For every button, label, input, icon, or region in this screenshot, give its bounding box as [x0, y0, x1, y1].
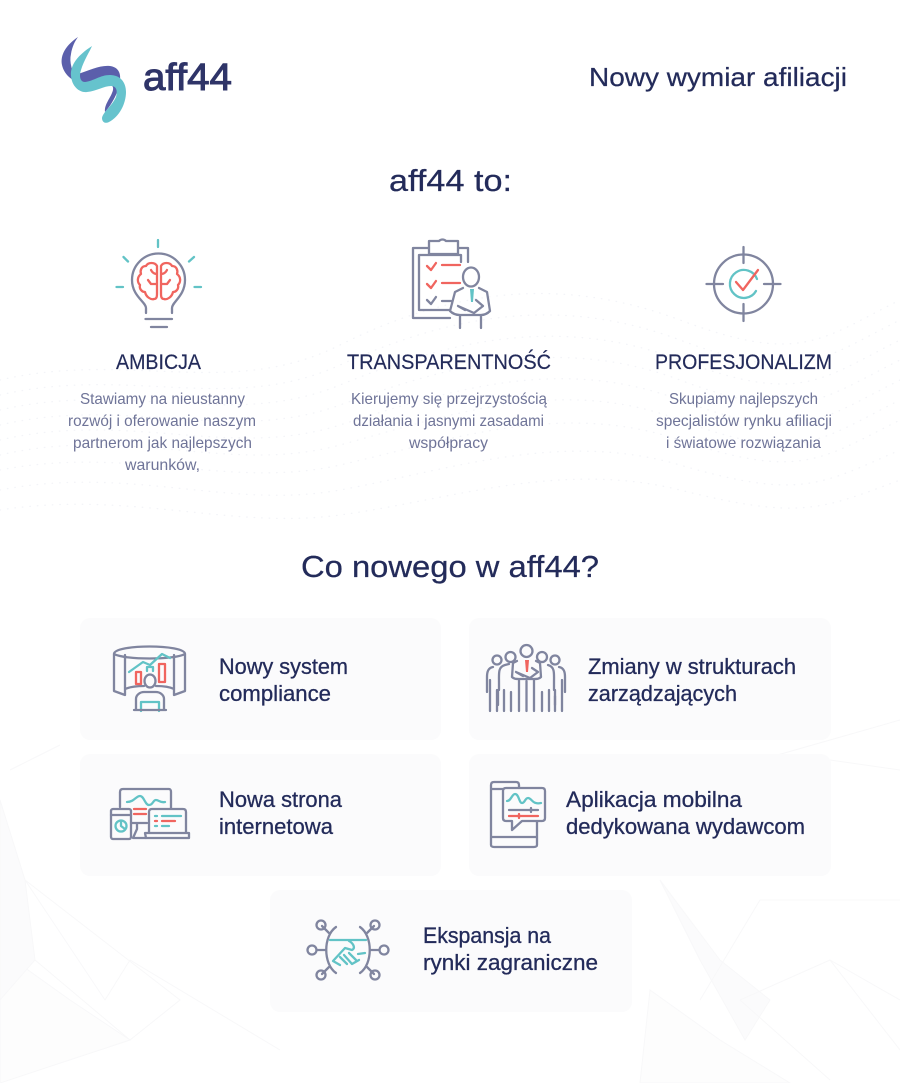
icon: handshake network [308, 920, 388, 980]
heading: aff44 to: aff44 to: [389, 163, 512, 198]
text: profesjonalizm description: specjalistów rynku afiliacji [656, 413, 832, 430]
heading: transparentność: TRANSPARENTNOŚĆ [347, 350, 551, 374]
text: profesjonalizm description [656, 391, 832, 452]
icon: monitor screens and user [114, 646, 185, 711]
text: ambicja description: rozwój i oferowanie naszym [68, 413, 256, 430]
text: transparentność description [351, 391, 547, 452]
column: transparentność [347, 240, 551, 452]
panel: aplikacja mobilna [469, 754, 831, 876]
text: strona internetowa: internetowa [219, 814, 334, 839]
icon: team of people [487, 645, 565, 711]
tagline: Nowy wymiar afiliacji [589, 62, 847, 92]
text: transparentność description: działania i jasnymi zasadami [353, 413, 544, 430]
column: ambicja [68, 240, 256, 474]
text: profesjonalizm description: Skupiamy najlepszych [669, 391, 818, 408]
logo wordmark: aff44 [143, 57, 232, 99]
column: profesjonalizm [655, 247, 832, 452]
text: compliance [219, 654, 348, 706]
text: ambicja description: partnerom jak najlepszych [73, 435, 252, 452]
text: ambicja description [68, 391, 256, 474]
text: zarządzanie: Zmiany w strukturach [588, 654, 796, 679]
text: ambicja description: warunków, [124, 457, 200, 474]
text: ekspansja: Ekspansja na [423, 923, 552, 948]
text: transparentność description: współpracy [408, 435, 488, 452]
panel: zarządzanie [469, 618, 831, 740]
icon: devices [111, 789, 189, 839]
logo mark [62, 37, 126, 123]
icon: target with check [706, 247, 780, 321]
text: compliance: Nowy system [219, 654, 348, 679]
icon: clipboard and person [413, 240, 490, 328]
heading: profesjonalizm: PROFESJONALIZM [655, 351, 832, 374]
panel: compliance [80, 618, 441, 740]
background: dotted wave and polygon network [0, 294, 900, 1083]
text: ekspansja: rynki zagraniczne [423, 950, 598, 975]
text: transparentność description: Kierujemy się przejrzystością [351, 391, 547, 408]
logo [62, 37, 232, 123]
panel: ekspansja [270, 890, 632, 1012]
icon: phone with chat bubble [491, 782, 545, 847]
text: zarządzanie: zarządzających [588, 681, 737, 706]
text: strona internetowa [219, 787, 343, 839]
text: aplikacja mobilna [566, 787, 805, 839]
panel: strona internetowa [80, 754, 441, 876]
text: ekspansja [423, 923, 598, 975]
text: aplikacja mobilna: dedykowana wydawcom [566, 814, 805, 839]
text: aplikacja mobilna: Aplikacja mobilna [566, 787, 743, 812]
text: zarządzanie [588, 654, 796, 706]
text: profesjonalizm description: i światowe rozwiązania [666, 435, 821, 452]
text: compliance: compliance [219, 681, 331, 706]
heading: ambicja: AMBICJA [116, 351, 201, 374]
text: strona internetowa: Nowa strona [219, 787, 343, 812]
icon: light bulb with brain [116, 240, 201, 327]
text: ambicja description: Stawiamy na nieustanny [80, 391, 245, 408]
heading: co nowego: Co nowego w aff44? [301, 549, 599, 584]
